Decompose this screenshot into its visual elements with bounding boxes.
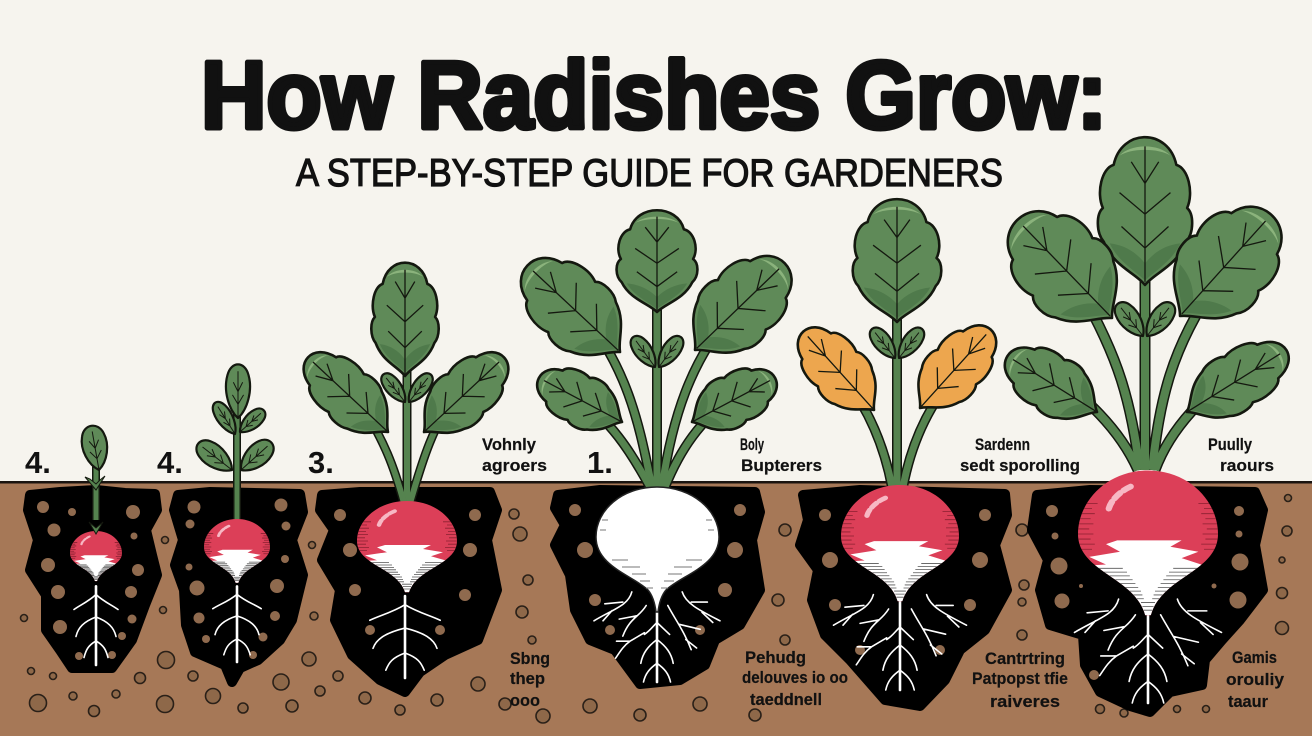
- root: [370, 596, 440, 678]
- label: delouves io oo: [742, 668, 848, 687]
- soil pebbles: [20, 494, 1292, 723]
- label: Pehudg: [745, 648, 806, 667]
- label: sedt sporolling: [960, 456, 1080, 475]
- plant stage 1: sprout: [65, 424, 127, 665]
- root: [834, 595, 966, 690]
- stem: [233, 400, 241, 522]
- soil pocket 4: [555, 490, 760, 684]
- label: Boly: [740, 435, 764, 454]
- label: raiveres: [990, 692, 1060, 711]
- label: Puully: [1208, 435, 1252, 454]
- sprout sepals: [89, 522, 103, 534]
- leaves: [501, 210, 812, 445]
- stems: [842, 290, 955, 487]
- number 1: 1.: [587, 445, 613, 480]
- step numbers: [25, 445, 613, 480]
- leaves: [192, 364, 279, 479]
- stems: [575, 300, 735, 487]
- label: taaur: [1228, 692, 1268, 711]
- soil pocket 2: [174, 492, 303, 682]
- stems: [1030, 280, 1265, 470]
- soil ground: [0, 482, 1312, 736]
- white radish: [596, 487, 719, 612]
- label: taeddnell: [750, 690, 822, 709]
- label: Sbng: [510, 649, 550, 668]
- soil pocket 3: [320, 492, 497, 692]
- upper labels: [482, 435, 1274, 475]
- radish: [347, 501, 467, 597]
- number 4 second: 4.: [157, 445, 183, 480]
- leaves: [984, 137, 1306, 437]
- label: raours: [1220, 456, 1274, 475]
- label: Patpopst tfie: [972, 669, 1068, 688]
- plant stage 2: [192, 364, 279, 662]
- number 3: 3.: [308, 445, 334, 480]
- label: ooo: [510, 691, 540, 710]
- label: orouliy: [1226, 670, 1285, 689]
- soil pocket 1: [28, 490, 157, 668]
- white radish hatching: [600, 520, 714, 588]
- plant stage 5: [782, 199, 1012, 690]
- ground line: [0, 481, 1312, 484]
- sprout radish: [65, 531, 127, 584]
- radish: [197, 519, 277, 586]
- stems: [355, 330, 458, 503]
- sprout cotyledons: [85, 476, 105, 490]
- label: Gamis: [1232, 648, 1277, 667]
- label: agroers: [482, 456, 547, 475]
- soil pocket 5: [800, 490, 1007, 706]
- sprout stem: [92, 466, 100, 520]
- title: How Radishes Grow:: [201, 42, 1107, 149]
- label: Vohnly: [482, 435, 537, 454]
- sprout leaf: [79, 424, 111, 472]
- plant stage 6: [984, 137, 1306, 703]
- soil pocket 6: [1032, 490, 1263, 712]
- label: Sardenn: [975, 435, 1030, 454]
- leaves: [288, 263, 524, 453]
- radish: [1064, 470, 1232, 623]
- root: [1074, 599, 1222, 703]
- pocket pebbles: [37, 498, 1248, 680]
- root: [594, 592, 720, 682]
- label: thep: [510, 669, 545, 688]
- lower labels: [510, 648, 1285, 711]
- plant stage 3: [288, 263, 524, 678]
- leaves: [782, 199, 1012, 429]
- label: Cantrtring: [985, 649, 1065, 668]
- number 4: 4.: [25, 445, 51, 480]
- label: Bupterers: [741, 456, 822, 475]
- subtitle: A STEP-BY-STEP GUIDE FOR GARDENERS: [296, 152, 1003, 195]
- plant stage 4: white radish: [501, 210, 812, 682]
- sprout root: [74, 586, 118, 665]
- root: [213, 586, 261, 662]
- radish: [829, 485, 971, 607]
